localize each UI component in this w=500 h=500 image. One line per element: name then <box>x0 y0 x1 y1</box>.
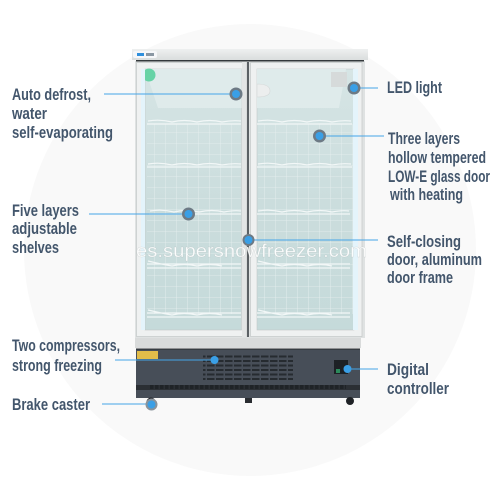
callout: auto defrost <box>11 85 243 142</box>
LED strip left <box>141 69 145 330</box>
LED strip right <box>353 69 358 330</box>
upper evaporator cover <box>145 69 242 108</box>
callout: self-closing door: door frame <box>387 268 453 287</box>
left caster <box>146 398 156 406</box>
digital controller box <box>334 360 348 374</box>
callout: three layers glass door: Three layers <box>388 129 460 148</box>
callout: LED light <box>348 78 442 97</box>
wire back grid <box>258 124 353 314</box>
lower trim band <box>135 338 361 348</box>
callout: two compressors: strong freezing <box>12 356 102 375</box>
callout: two compressors <box>12 336 218 375</box>
base panel <box>136 348 360 398</box>
callout: self-closing door <box>242 232 482 287</box>
callout: five layers shelves: Five layers <box>12 201 79 220</box>
upper evaporator cover <box>257 69 346 108</box>
bottom grille <box>136 385 360 390</box>
callout: five layers shelves: shelves <box>12 238 59 257</box>
watermark: es.supersnowfreezer.com <box>136 241 367 261</box>
freezer <box>132 49 368 406</box>
left door <box>136 62 246 337</box>
compressor vent <box>203 354 293 381</box>
callout: auto defrost: Auto defrost, <box>12 85 91 104</box>
callout: two compressors: Two compressors, <box>12 336 120 355</box>
callout: brake caster: Brake caster <box>12 395 90 414</box>
fan <box>257 84 270 97</box>
cabinet body <box>135 61 365 338</box>
callout: auto defrost: self-evaporating <box>12 123 113 142</box>
right door <box>250 62 362 336</box>
warning label <box>137 351 158 359</box>
shelves <box>257 120 352 317</box>
callout: digital controller <box>344 360 449 398</box>
callout: auto defrost: water <box>11 104 47 123</box>
callout: five layers shelves: adjustable <box>12 219 77 238</box>
logo badge <box>133 51 157 58</box>
callout: self-closing door: Self-closing <box>387 232 461 251</box>
wire back grid <box>147 124 241 314</box>
callout: three layers glass door <box>313 129 490 204</box>
callout: LED light: LED light <box>387 78 442 97</box>
callout: digital controller: Digital <box>387 360 429 379</box>
green sticker <box>142 68 156 82</box>
top header panel <box>132 49 368 60</box>
shelves <box>147 120 241 317</box>
door center stile left <box>242 62 246 337</box>
callout: digital controller: controller <box>387 379 449 398</box>
callout: three layers glass door: with heating <box>389 185 463 204</box>
spec label <box>331 72 347 87</box>
right caster <box>346 397 354 405</box>
callout: five layers shelves <box>12 201 195 257</box>
center foot <box>245 398 252 403</box>
door gap <box>247 62 249 337</box>
